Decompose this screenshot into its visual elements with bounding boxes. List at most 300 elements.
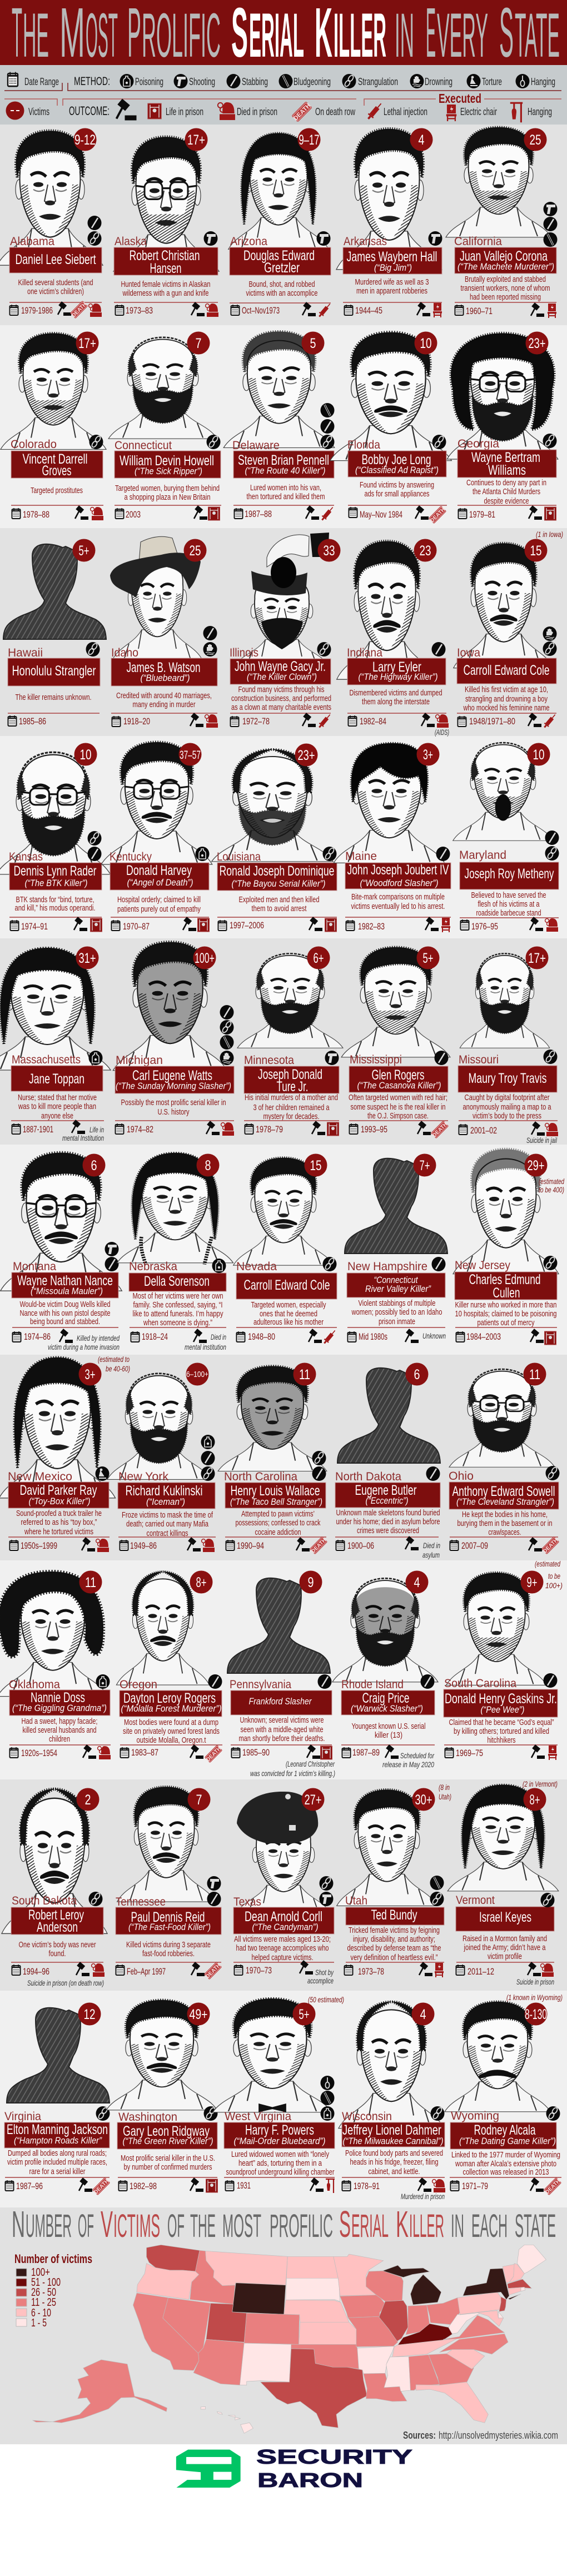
description xyxy=(463,685,549,713)
name xyxy=(335,1483,440,1508)
dates: 1985–86 xyxy=(19,716,46,727)
card: Mississippi xyxy=(341,946,450,1139)
victim count xyxy=(298,128,320,151)
description: men in apparent robberies xyxy=(356,286,427,296)
victim count: 6+ xyxy=(314,951,324,966)
name: Vincent Darrell xyxy=(22,451,88,467)
name: Henry Louis Wallace xyxy=(230,1483,320,1499)
victim count: 23+ xyxy=(298,748,315,763)
description: rare for a serial killer xyxy=(29,2167,86,2176)
state: New Mexico xyxy=(8,1470,72,1483)
state: North Carolina xyxy=(224,1470,297,1483)
name xyxy=(118,1483,215,1509)
victim count xyxy=(415,331,437,355)
method icons xyxy=(430,2106,445,2121)
state: Virginia xyxy=(4,2110,41,2123)
card: West Virginia xyxy=(213,1995,344,2193)
description: crawlspaces. xyxy=(488,1528,521,1537)
description: very definition of heartless evil.” xyxy=(350,1953,438,1962)
name: Donald Harvey xyxy=(126,863,192,878)
portrait xyxy=(0,1357,115,1498)
description: women; possibly tied to an Idaho xyxy=(351,1307,442,1317)
map section heading: MOST xyxy=(222,2208,261,2244)
name xyxy=(349,1066,448,1092)
outcome xyxy=(62,1120,104,1142)
name: Douglas Edward xyxy=(243,248,315,263)
name xyxy=(460,862,559,889)
portrait xyxy=(223,331,335,447)
card: Delaware xyxy=(223,331,335,522)
silhouette portrait xyxy=(227,1578,330,1673)
description: cabinet, and kettle. xyxy=(368,2167,420,2176)
name: (“Warwick Slasher”) xyxy=(351,1703,423,1714)
method icons xyxy=(322,847,337,861)
card: South Dakota xyxy=(2,1788,107,1987)
name xyxy=(129,1273,226,1291)
description: man shortly before their deaths. xyxy=(239,1734,325,1743)
method icons xyxy=(320,403,335,449)
description xyxy=(122,1510,213,1538)
description xyxy=(14,895,96,913)
outcome icons xyxy=(530,2177,562,2196)
description: was to kill more people than xyxy=(18,1102,96,1111)
method icons xyxy=(203,231,218,246)
name xyxy=(345,862,451,889)
name: Steven Brian Pennell xyxy=(238,452,329,468)
outcome icons xyxy=(309,1329,337,1345)
name: Carl Eugene Watts xyxy=(132,1068,212,1083)
description xyxy=(455,1300,557,1327)
victim count xyxy=(524,1363,546,1385)
silhouette portrait xyxy=(345,1158,447,1254)
dates xyxy=(456,1962,554,1977)
description xyxy=(20,1300,110,1326)
description xyxy=(121,1098,226,1117)
name: (“The Sick Ripper”) xyxy=(135,466,202,476)
map legend: 26 - 50 xyxy=(31,2286,56,2299)
outcome xyxy=(185,1329,226,1351)
card: New Jersey xyxy=(453,1149,565,1345)
description: contract killings xyxy=(147,1529,188,1538)
name xyxy=(217,863,337,891)
card: Rhode Island xyxy=(332,1571,438,1769)
dates xyxy=(11,1962,103,1977)
description: Targeted prostitutes xyxy=(31,486,83,495)
description: fast-food robberies. xyxy=(142,1949,195,1958)
name xyxy=(233,1907,334,1934)
legend: outcome: Lethal injection xyxy=(384,106,427,117)
name xyxy=(450,2122,556,2149)
title xyxy=(12,0,560,72)
name xyxy=(224,2122,335,2149)
dates xyxy=(130,1327,226,1342)
dates xyxy=(230,303,331,316)
description xyxy=(234,1935,331,1962)
dates: 1918–24 xyxy=(142,1331,168,1342)
outcome icons xyxy=(415,505,447,524)
state: New Hampshire xyxy=(347,1260,427,1273)
description: One victim’s body was never xyxy=(19,1940,96,1950)
name xyxy=(9,863,102,890)
description: heart” ads, torturing them in a xyxy=(238,2159,322,2168)
card: Pennsylvania xyxy=(227,1571,335,1778)
description xyxy=(345,2149,443,2176)
portrait xyxy=(1,1153,122,1291)
state: Nevada xyxy=(236,1260,277,1273)
portrait xyxy=(453,1149,559,1274)
victim count: 9–17 xyxy=(299,132,319,148)
description xyxy=(245,1093,338,1121)
outcome: mental institution xyxy=(185,1342,226,1351)
description xyxy=(336,1508,440,1535)
method icons xyxy=(207,1876,221,1906)
outcome icons xyxy=(302,713,332,729)
method icons xyxy=(312,1451,326,1481)
description: roadside barbecue stand xyxy=(476,908,541,918)
Security Baron wordmark: SECURITY xyxy=(256,2445,412,2468)
name: Gary Leon Ridgway xyxy=(123,2124,210,2139)
method icons xyxy=(89,435,103,449)
victim count xyxy=(76,331,99,355)
victim count xyxy=(524,1788,546,1811)
description xyxy=(21,1717,98,1744)
name: (“The Fast-Food Killer”) xyxy=(128,1922,211,1932)
dates xyxy=(8,713,100,727)
description xyxy=(462,1093,551,1121)
name: Williams xyxy=(488,463,526,478)
outcome icons xyxy=(528,713,557,729)
map section heading: K xyxy=(396,2204,409,2245)
name: (“Angel of Death”) xyxy=(127,877,193,888)
description: then tortured and killed them xyxy=(247,492,325,501)
card: Kentucky xyxy=(101,742,212,932)
outcome icons xyxy=(306,505,335,522)
victim count: 8-130 xyxy=(525,2007,547,2022)
card: Massachusetts xyxy=(0,946,111,1142)
state: Minnesota xyxy=(244,1054,294,1067)
victim count: 9 xyxy=(308,1575,314,1590)
state: Michigan xyxy=(116,1054,163,1067)
name: Ture Jr. xyxy=(277,1079,308,1095)
name: (“Woodford Slasher”) xyxy=(360,878,438,888)
description: under his home; died in asylum before xyxy=(336,1517,440,1526)
state: Colorado xyxy=(11,438,57,451)
name xyxy=(115,451,221,478)
dates: 2001–02 xyxy=(470,1125,497,1136)
name xyxy=(230,247,331,276)
name: Ted Bundy xyxy=(371,1907,417,1923)
portrait xyxy=(106,2000,217,2110)
description: 3 of her children remained a xyxy=(253,1103,330,1112)
description: referred to as his “toy box,” xyxy=(21,1518,97,1527)
portrait xyxy=(107,1374,211,1479)
map section heading xyxy=(12,2204,556,2245)
description: Killed several students (and xyxy=(18,278,93,287)
card: New Hampshire xyxy=(345,1154,447,1343)
name xyxy=(9,1690,110,1715)
description: family. She confessed, saying, “I xyxy=(133,1300,222,1310)
description xyxy=(115,484,220,502)
description xyxy=(16,1509,102,1536)
outcome icons xyxy=(190,1744,223,1763)
name xyxy=(343,247,442,274)
outcome icons xyxy=(417,302,442,317)
dates xyxy=(224,2177,335,2191)
card: Minnesota xyxy=(237,946,343,1136)
dates xyxy=(115,505,221,520)
dates: 1987–88 xyxy=(245,509,272,519)
map section heading: S xyxy=(339,2204,351,2245)
outcome icons xyxy=(421,713,449,737)
map legend: 100+ xyxy=(31,2266,50,2279)
map section heading: V xyxy=(101,2204,113,2245)
dates xyxy=(8,1537,110,1551)
victim count: 6 xyxy=(414,1367,420,1383)
outcome icons xyxy=(529,505,556,520)
outcome: was convicted for 1 victim’s killing.) xyxy=(250,1769,335,1778)
card: Idaho xyxy=(110,536,218,728)
outcome icons xyxy=(312,1121,339,1136)
method icons xyxy=(435,1051,448,1065)
description xyxy=(19,1940,96,1958)
dates xyxy=(118,1537,216,1551)
description xyxy=(121,2154,215,2172)
victim count: 4 xyxy=(418,132,425,148)
method icons xyxy=(426,1466,440,1481)
name: Larry Eyler xyxy=(372,659,421,675)
state: Wyoming xyxy=(451,2110,499,2122)
title: ERIAL xyxy=(249,1,304,70)
portrait xyxy=(334,743,445,863)
victim count xyxy=(411,2002,435,2026)
name: James Waybern Hall xyxy=(347,249,437,265)
description xyxy=(7,2149,107,2176)
dates: 1931 xyxy=(237,2180,251,2191)
state: Alabama xyxy=(10,235,54,248)
legend: victims xyxy=(6,101,49,120)
outcome icons xyxy=(190,713,218,728)
card: Colorado xyxy=(1,331,106,520)
description: Killed victims during 3 separate xyxy=(126,1940,211,1950)
name xyxy=(115,1066,234,1093)
portrait xyxy=(0,948,111,1070)
card: Virginia xyxy=(4,2002,111,2196)
state: Kentucky xyxy=(110,851,152,863)
description: Attempted to pawn victims’ xyxy=(241,1509,315,1519)
portrait xyxy=(336,129,442,270)
description: patients purely out of empathy xyxy=(117,904,201,914)
description: All victims were males aged 13-20; xyxy=(234,1935,331,1944)
state: Rhode Island xyxy=(341,1678,404,1691)
name xyxy=(117,2122,217,2149)
description: Bite-mark comparisons on multiple xyxy=(351,892,445,902)
outcome: Murdered in prison xyxy=(401,2192,445,2201)
dates: Feb–Apr 1997 xyxy=(127,1966,166,1977)
method icons xyxy=(420,1674,435,1689)
description: had been reported missing xyxy=(470,292,541,302)
legend: method: Drowning xyxy=(425,76,452,87)
victim count: 31+ xyxy=(79,951,96,966)
victim count: 17+ xyxy=(78,336,96,351)
legend: outcome: Died in prison xyxy=(237,106,277,117)
description xyxy=(239,895,319,913)
description: crimes were discovered xyxy=(357,1526,419,1535)
victim count xyxy=(76,946,99,969)
name xyxy=(455,1272,557,1301)
description xyxy=(239,1715,325,1743)
portrait xyxy=(218,1366,327,1471)
description xyxy=(121,280,210,298)
state: South Dakota xyxy=(12,1894,77,1907)
card: Hawaii xyxy=(3,539,106,727)
state: Montana xyxy=(13,1260,56,1273)
map section heading: PROFILIC xyxy=(270,2208,333,2244)
method icons xyxy=(203,2106,218,2121)
dates xyxy=(9,302,102,316)
description xyxy=(226,2150,335,2177)
card: Nebraska xyxy=(117,1153,233,1351)
Security Baron wordmark: BARON xyxy=(257,2469,363,2492)
state: Georgia xyxy=(457,437,499,450)
description xyxy=(462,1934,547,1961)
card: Florida xyxy=(330,331,451,524)
description xyxy=(355,277,429,296)
dates xyxy=(444,1745,558,1758)
description: victim profile included multiple races, xyxy=(7,2157,107,2167)
outcome icons xyxy=(183,917,209,932)
name xyxy=(348,451,446,477)
name: (“Mail-Order Bluebeard”) xyxy=(233,2136,326,2146)
outcome icons xyxy=(83,1744,111,1759)
victim count: 25 xyxy=(189,543,201,559)
method icons xyxy=(207,435,220,449)
annotation xyxy=(98,1355,130,1373)
description xyxy=(466,478,546,506)
victim count: 7 xyxy=(196,1792,202,1808)
portrait xyxy=(233,1158,334,1265)
name xyxy=(8,658,100,686)
description: Lured widowed women with “lonely xyxy=(231,2150,329,2159)
portrait xyxy=(117,1153,233,1264)
outcome: release in May 2020 xyxy=(382,1760,434,1769)
state: Pennsylvania xyxy=(230,1678,291,1691)
method icons xyxy=(428,231,442,246)
dates: 1982–98 xyxy=(130,2181,157,2191)
state: Kansas xyxy=(9,851,43,863)
victim count xyxy=(78,2002,101,2026)
state: Oregon xyxy=(120,1678,157,1691)
victim count: 17+ xyxy=(187,132,205,148)
dates xyxy=(348,505,447,520)
victim count xyxy=(292,2002,316,2026)
description xyxy=(132,1291,223,1327)
method icons xyxy=(317,642,331,657)
dates: 1971–79 xyxy=(462,2181,488,2191)
description: had two teenage accomplices who xyxy=(236,1943,329,1953)
description xyxy=(351,1299,442,1326)
description: Often targeted women with red hair; xyxy=(349,1093,447,1102)
name xyxy=(9,247,102,273)
description xyxy=(449,1718,554,1745)
dates: 1974–86 xyxy=(24,1331,51,1342)
name: Hansen xyxy=(150,261,181,276)
method icons xyxy=(212,1259,226,1273)
victim count xyxy=(301,331,325,355)
name xyxy=(111,658,217,686)
name xyxy=(449,1482,559,1509)
name: Glen Rogers xyxy=(371,1067,425,1083)
map legend: 6 - 10 xyxy=(31,2307,51,2319)
outcome icons xyxy=(187,1537,215,1552)
method icons xyxy=(320,2076,335,2121)
description: hitchhikers xyxy=(487,1735,516,1745)
victim count xyxy=(197,1154,219,1176)
legend: victims: Victims xyxy=(28,106,49,117)
state: Idaho xyxy=(111,647,138,659)
card: Illinois xyxy=(230,533,340,729)
name: River Valley Killer” xyxy=(365,1284,431,1294)
dates xyxy=(120,1745,222,1758)
state: Louisiana xyxy=(217,851,261,863)
outcome: Life in xyxy=(89,1125,104,1134)
portrait xyxy=(116,1572,210,1685)
description: children xyxy=(49,1734,70,1744)
description: Froze victims to mask the time of xyxy=(122,1510,213,1520)
victim count xyxy=(412,1788,435,1811)
outcome: Shot by xyxy=(315,1968,334,1977)
annotation xyxy=(439,1783,451,1801)
name: (“Missoula Mauler”) xyxy=(31,1286,103,1296)
dates xyxy=(459,1121,558,1136)
state: Florida xyxy=(347,439,380,451)
description xyxy=(351,892,445,911)
dates: May–Nov 1984 xyxy=(360,509,402,520)
description: Nurse; stated that her motive xyxy=(18,1093,97,1102)
card: Michigan xyxy=(113,942,234,1136)
name: Bobby Joe Long xyxy=(361,452,431,468)
dates xyxy=(343,302,442,316)
outcome icons xyxy=(309,917,337,932)
portrait xyxy=(332,1578,438,1682)
victim count xyxy=(527,743,550,766)
dates: 1973–78 xyxy=(358,1966,384,1977)
name xyxy=(236,1273,337,1299)
victim count xyxy=(318,539,340,561)
description: patients out of mercy xyxy=(477,1318,535,1327)
victim count: 17+ xyxy=(528,951,546,966)
card: Iowa xyxy=(454,530,563,729)
outcome icons xyxy=(310,2177,335,2193)
name: Dayton Leroy Rogers xyxy=(123,1690,216,1706)
state: Wisconsin xyxy=(342,2110,392,2123)
victim count xyxy=(77,1788,99,1811)
card: Washington xyxy=(106,2000,218,2192)
victim count: 49+ xyxy=(189,2007,208,2022)
description: death; carried out many Mafia xyxy=(126,1519,208,1529)
dates: 1920s–1954 xyxy=(21,1748,57,1758)
card: Georgia xyxy=(447,331,558,520)
outcome icons xyxy=(79,2177,111,2196)
name: Dean Arnold Corll xyxy=(245,1909,322,1924)
outcome: Unknown xyxy=(422,1331,446,1340)
state: Delaware xyxy=(232,439,280,452)
state: Missouri xyxy=(459,1053,499,1066)
victim count: 5+ xyxy=(299,2007,309,2022)
description: BTK stands for “bind, torture, xyxy=(16,895,94,904)
description: them along the interstate xyxy=(362,697,430,707)
title: ROLIFIC xyxy=(142,1,221,70)
portrait xyxy=(330,332,451,461)
